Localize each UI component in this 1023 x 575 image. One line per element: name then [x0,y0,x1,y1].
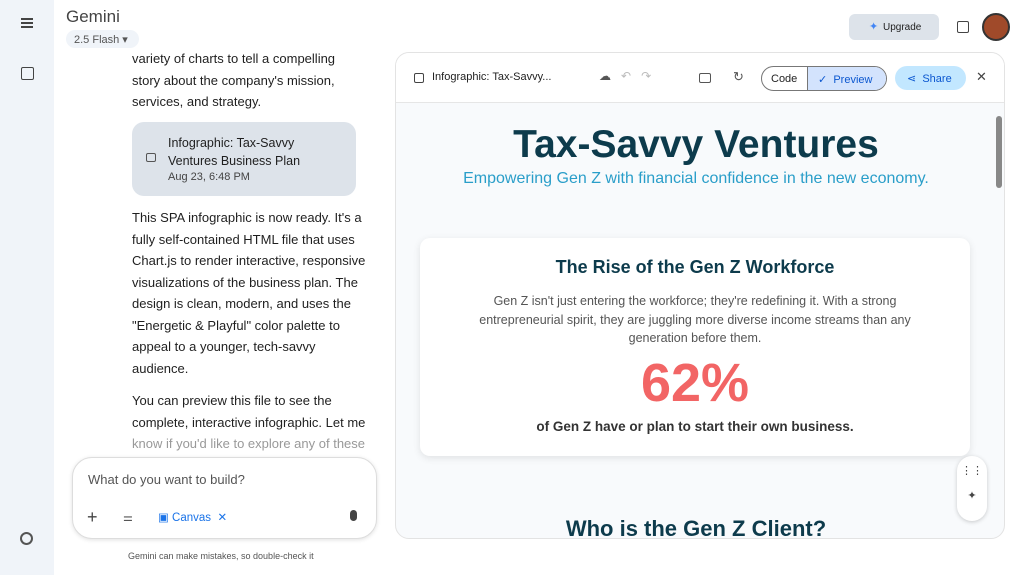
sidebar [0,0,54,575]
subtitle: Empowering Gen Z with financial confidence in the new economy. [463,170,929,187]
floating tools: ✦ [967,490,977,502]
upgrade button [849,14,939,40]
canvas panel [395,52,1005,539]
icon: store [957,21,969,33]
toolbar: ✓ Preview [818,74,872,86]
chat text 2 [132,210,365,451]
input box: What do you want to build? [88,472,245,487]
avatar [982,13,1010,41]
artifact card [132,122,356,196]
model pill: 2.5 Flash ▾ [74,34,128,46]
card paragraph: Gen Z isn't just entering the workforce; they're redefining it. With a strong entrepreneurial spirit, they are juggling more diverse income streams than any generation before them. [479,294,911,345]
upgrade button: Upgrade [883,22,921,33]
floating tools: ⋮⋮ [961,465,983,477]
card heading: The Rise of the Gen Z Workforce [556,257,834,277]
toolbar [396,53,1006,103]
stat caption: of Gen Z have or plan to start their own business. [536,419,854,434]
input box [72,457,377,539]
chat text 2: You can preview this file to see the complete, interactive infographic. Let me know if you'd like to explore any of these [132,393,365,451]
toolbar: ☁ ↶ ↷ [599,69,651,83]
artifact card: Aug 23, 6:48 PM [168,171,250,183]
artifact card: Ventures Business Plan [168,154,300,168]
title: Tax-Savvy Ventures [513,123,879,166]
input box: ▣ Canvas ✕ [158,512,227,524]
floating tools [957,456,987,521]
toolbar: ↻ [733,69,744,84]
input box: + [87,507,98,527]
icon: settings [20,532,33,545]
header: Gemini: Gemini [66,7,120,26]
scrollbar [996,116,1002,188]
input box: ⚌ [123,512,133,524]
toolbar: ⋖ Share [907,73,952,85]
toolbar: ✕ [976,69,987,84]
chat text 2: This SPA infographic is now ready. It's a fully self-contained HTML file that uses Chart.js to render interactive, responsive visualizations of the business plan. The design is clean, modern, and uses the "Energetic & Playful" color palette to appeal to a younger, tech-savvy audience. [132,210,365,376]
stat 62%: 62% [641,353,749,413]
artifact card: Infographic: Tax-Savvy [168,136,294,150]
icon: new chat [21,67,34,80]
model pill [66,30,139,48]
chat text: variety of charts to tell a compelling story about the company's mission, services, and strategy. [132,51,335,109]
icon: menu [21,18,33,28]
upgrade button: ✦ [869,21,878,33]
panel: Gen Z workforce [420,238,970,456]
toolbar: Code [771,73,797,85]
disclaimer: Gemini can make mistakes, so double-check it [128,551,314,561]
toolbar: Infographic: Tax-Savvy... [432,71,551,83]
